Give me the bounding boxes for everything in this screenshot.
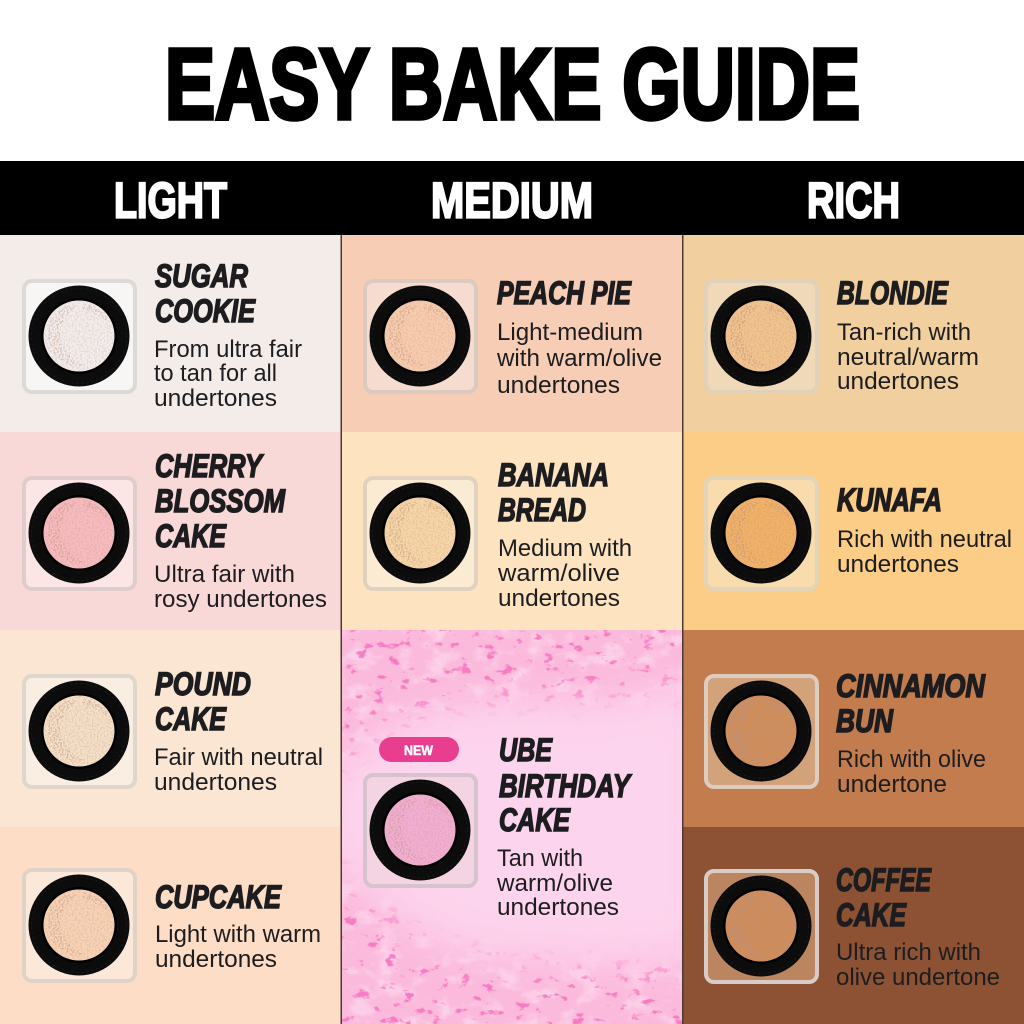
compact: sugar cookie	[24, 281, 135, 392]
panel: pound cake	[0, 630, 341, 827]
panel: banana bread: warm/olive	[497, 560, 620, 587]
badge: new: NEW	[404, 742, 434, 758]
panel: ube birthday cake: undertones	[497, 894, 619, 921]
panel: ube birthday cake	[342, 630, 682, 1024]
panel: cupcake	[0, 827, 341, 1024]
panel: coffee cake	[683, 827, 1024, 1024]
panel: sugar cookie	[0, 235, 341, 432]
panel: cherry blossom cake	[0, 432, 341, 630]
compact: banana bread	[365, 478, 476, 589]
panel: blondie: BLONDIE	[837, 275, 949, 311]
header band	[0, 161, 1024, 235]
compact: kunafa	[706, 478, 817, 589]
panel: blondie: neutral/warm	[837, 344, 979, 371]
panel: kunafa: undertones	[837, 551, 959, 578]
panel: coffee cake: Ultra rich with	[836, 939, 981, 966]
panel: ube birthday cake: Tan with	[497, 845, 583, 872]
panel: sugar cookie: From ultra fair	[154, 336, 302, 363]
panel: banana bread: BANANA	[498, 457, 609, 493]
compact: cupcake	[24, 870, 135, 981]
panel: coffee cake: COFFEE	[836, 862, 932, 898]
compact: peach pie	[365, 281, 476, 392]
panel: peach pie	[341, 235, 683, 432]
panel: cherry blossom cake: BLOSSOM	[155, 483, 286, 519]
panel: cinnamon bun: BUN	[836, 703, 894, 739]
panel: cherry blossom cake: CAKE	[155, 518, 227, 554]
panel: cupcake: undertones	[155, 946, 277, 973]
panel: banana bread: undertones	[498, 585, 620, 612]
panel: blondie	[683, 235, 1024, 432]
panel: peach pie: undertones	[497, 372, 620, 399]
panel: coffee cake: CAKE	[836, 897, 907, 933]
panel: sugar cookie: COOKIE	[155, 293, 256, 329]
panel: peach pie: PEACH PIE	[497, 275, 632, 311]
panel: cinnamon bun: undertone	[837, 771, 947, 798]
badge: new	[379, 737, 459, 762]
panel: ube birthday cake: warm/olive	[496, 870, 613, 897]
compact: cherry blossom cake	[24, 478, 135, 589]
panel: pound cake: Fair with neutral	[154, 744, 323, 771]
panel: ube birthday cake: UBE	[499, 732, 553, 768]
panel: cupcake: CUPCAKE	[155, 879, 282, 915]
panel: cherry blossom cake: Ultra fair with	[154, 561, 295, 588]
panel: blondie: Tan-rich with	[837, 319, 971, 346]
header band: RICH	[807, 172, 900, 228]
panel: blondie: undertones	[837, 368, 959, 395]
panel: sugar cookie: SUGAR	[155, 258, 248, 294]
panel: banana bread	[341, 432, 683, 630]
panel: banana bread: Medium with	[498, 535, 632, 562]
panel: peach pie: Light-medium	[497, 319, 643, 346]
compact: ube birthday cake	[365, 775, 476, 886]
panel: cupcake: Light with warm	[155, 921, 321, 948]
panel: kunafa: KUNAFA	[837, 482, 942, 518]
panel: cherry blossom cake: CHERRY	[155, 448, 264, 484]
panel: cherry blossom cake: rosy undertones	[154, 586, 327, 613]
panel: kunafa	[683, 432, 1024, 630]
header band: MEDIUM	[431, 172, 593, 228]
panel: peach pie: with warm/olive	[496, 345, 662, 372]
panel: pound cake: POUND	[155, 666, 251, 702]
panel: cinnamon bun	[683, 630, 1024, 827]
panel: banana bread: BREAD	[498, 492, 586, 528]
panel: coffee cake: olive undertone	[836, 964, 1000, 991]
panel: cinnamon bun: Rich with olive	[837, 746, 986, 773]
header band: LIGHT	[114, 172, 227, 228]
panel: sugar cookie: to tan for all	[154, 360, 277, 387]
panel: ube birthday cake: BIRTHDAY	[499, 768, 632, 804]
compact: cinnamon bun	[706, 676, 817, 787]
panel: kunafa: Rich with neutral	[837, 526, 1012, 553]
panel: pound cake: CAKE	[155, 701, 227, 737]
panel: cinnamon bun: CINNAMON	[836, 668, 986, 704]
compact: blondie	[706, 281, 817, 392]
compact: pound cake	[24, 676, 135, 787]
panel: sugar cookie: undertones	[154, 385, 277, 412]
panel: pound cake: undertones	[154, 769, 277, 796]
compact: coffee cake	[706, 871, 817, 982]
panel: ube birthday cake: CAKE	[499, 802, 571, 838]
